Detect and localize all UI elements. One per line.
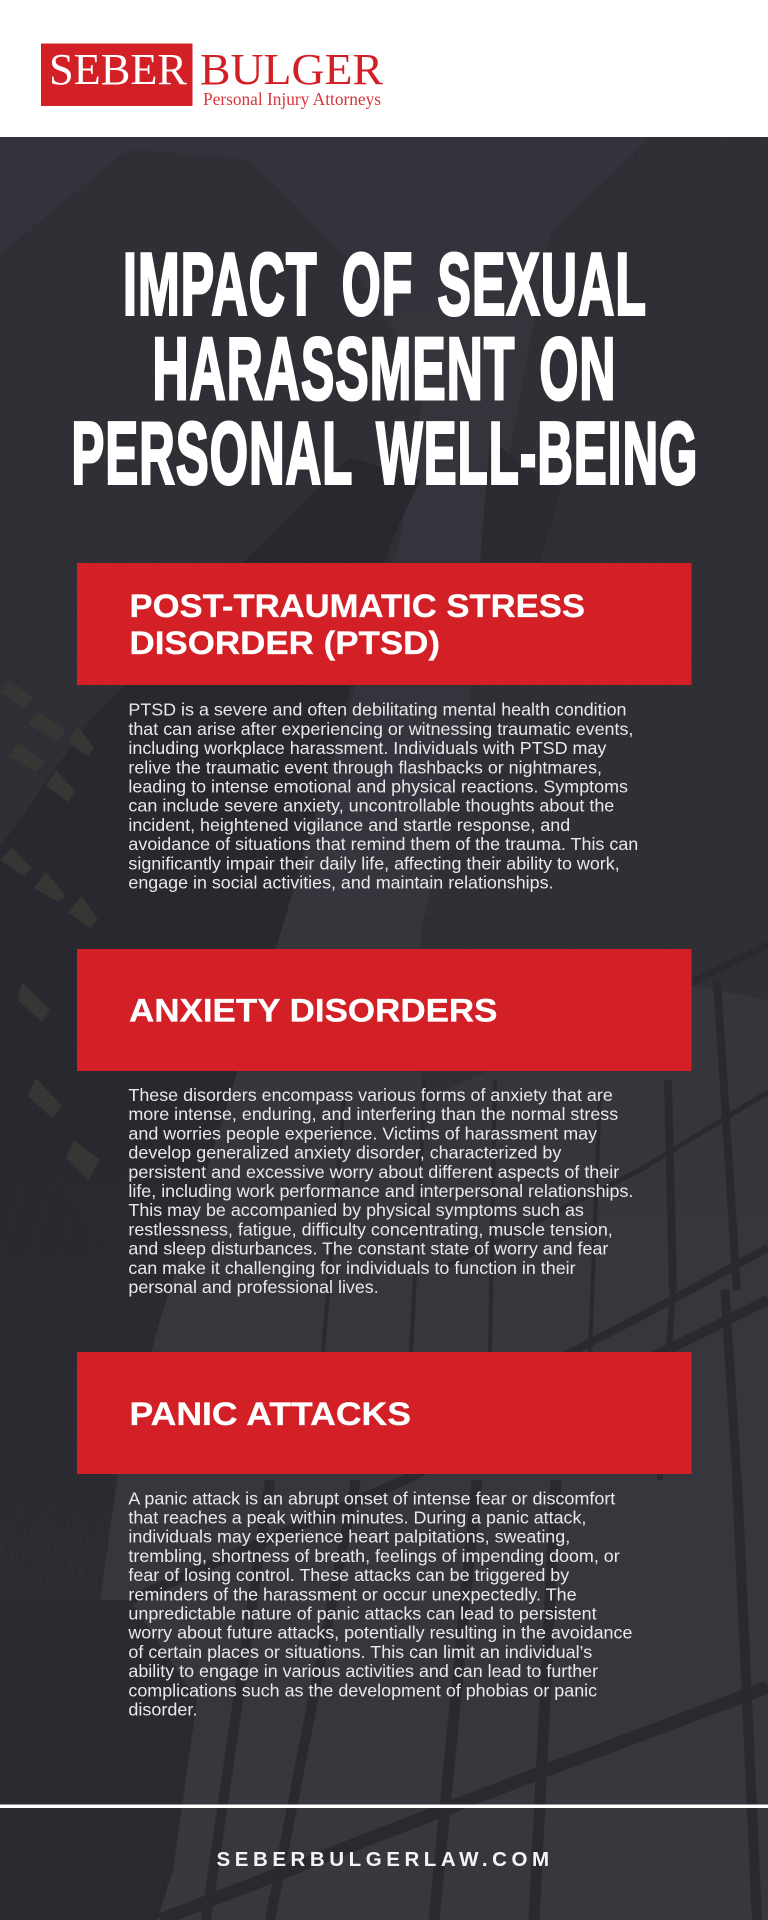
body text: PTSD: can include severe anxiety, uncontrollable thoughts about the (128, 796, 614, 816)
body text: PTSD: that can arise after experiencing or witnessing traumatic events, (128, 719, 633, 739)
body text: anxiety disorders: This may be accompanied by physical symptoms such as (128, 1200, 584, 1220)
panel: panic attacks (77, 1352, 692, 1720)
body text: anxiety disorders: persistent and excessive worry about different aspects of their (128, 1162, 619, 1182)
body text: anxiety disorders: restlessness, fatigue, difficulty concentrating, muscle tension, (128, 1219, 613, 1239)
body text: panic attacks (127, 1488, 632, 1720)
body text: anxiety disorders: These disorders encompass various forms of anxiety that are (128, 1085, 613, 1105)
logo red box (41, 44, 192, 106)
body text: anxiety disorders: and sleep disturbances. The constant state of worry and fear (128, 1239, 609, 1259)
logo word SEBER: SEBER (49, 45, 188, 94)
body text: PTSD: leading to intense emotional and physical reactions. Symptoms (128, 776, 628, 796)
panel: PTSD (77, 563, 692, 892)
body text: panic attacks: that reaches a peak within minutes. During a panic attack, (128, 1508, 586, 1528)
body text: anxiety disorders: can make it challenging for individuals to function in their (128, 1258, 576, 1278)
body text: panic attacks: worry about future attacks, potentially resulting in the avoidance (127, 1623, 632, 1643)
body text: anxiety disorders: more intense, enduring, and interfering than the normal stress (128, 1104, 619, 1124)
logo (41, 44, 384, 109)
body text: panic attacks: individuals may experience heart palpitations, sweating, (128, 1527, 570, 1547)
body text: PTSD: relive the traumatic event through flashbacks or nightmares, (128, 757, 602, 777)
header white band (0, 0, 768, 137)
body text: panic attacks: unpredictable nature of panic attacks can lead to persistent (128, 1604, 597, 1624)
body text: PTSD: PTSD is a severe and often debilitating mental health condition (128, 700, 626, 720)
heading bar: PTSD (77, 563, 692, 685)
heading bar: PTSD: DISORDER (PTSD) (130, 625, 440, 661)
body text: panic attacks: complications such as the development of phobias or panic (128, 1680, 597, 1700)
heading bar: anxiety disorders (77, 949, 692, 1071)
body text: PTSD: engage in social activities, and maintain relationships. (128, 872, 554, 892)
body text: panic attacks: disorder. (128, 1700, 197, 1720)
body text: panic attacks: A panic attack is an abrupt onset of intense fear or discomfort (128, 1488, 615, 1508)
body text: panic attacks: ability to engage in various activities and can lead to further (128, 1661, 598, 1681)
body text: PTSD: avoidance of situations that remind them of the trauma. This can (128, 834, 638, 854)
heading bar: panic attacks (77, 1352, 692, 1474)
body text: panic attacks: fear of losing control. These attacks can be triggered by (128, 1565, 570, 1585)
logo tagline: Personal Injury Attorneys (203, 89, 381, 109)
body text: anxiety disorders: and worries people experience. Victims of harassment may (128, 1123, 597, 1143)
logo word BULGER: BULGER (200, 45, 384, 94)
body text: PTSD: significantly impair their daily life, affecting their ability to work, (128, 853, 620, 873)
footer divider (0, 1804, 768, 1808)
title (72, 234, 698, 502)
panel: anxiety disorders (77, 949, 692, 1297)
heading bar: anxiety disorders: ANXIETY DISORDERS (129, 992, 498, 1028)
footer website url: SEBERBULGERLAW.COM (216, 1848, 552, 1871)
body text: anxiety disorders: personal and professional lives. (128, 1277, 379, 1297)
body text: panic attacks: reminders of the harassment or occur unexpectedly. The (128, 1584, 577, 1604)
body text: anxiety disorders: life, including work performance and interpersonal relationships. (128, 1181, 633, 1201)
heading bar: PTSD: POST-TRAUMATIC STRESS (130, 588, 585, 624)
body text: PTSD: incident, heightened vigilance and startle response, and (128, 815, 570, 835)
body text: PTSD (128, 700, 638, 892)
body text: PTSD: including workplace harassment. Individuals with PTSD may (128, 738, 607, 758)
heading bar: panic attacks: PANIC ATTACKS (130, 1396, 411, 1432)
body text: anxiety disorders: develop generalized anxiety disorder, characterized by (128, 1143, 562, 1163)
body text: panic attacks: trembling, shortness of breath, feelings of impending doom, or (128, 1546, 620, 1566)
body text: panic attacks: of certain places or situations. This can limit an individual’s (128, 1642, 593, 1662)
body text: anxiety disorders (128, 1085, 633, 1297)
